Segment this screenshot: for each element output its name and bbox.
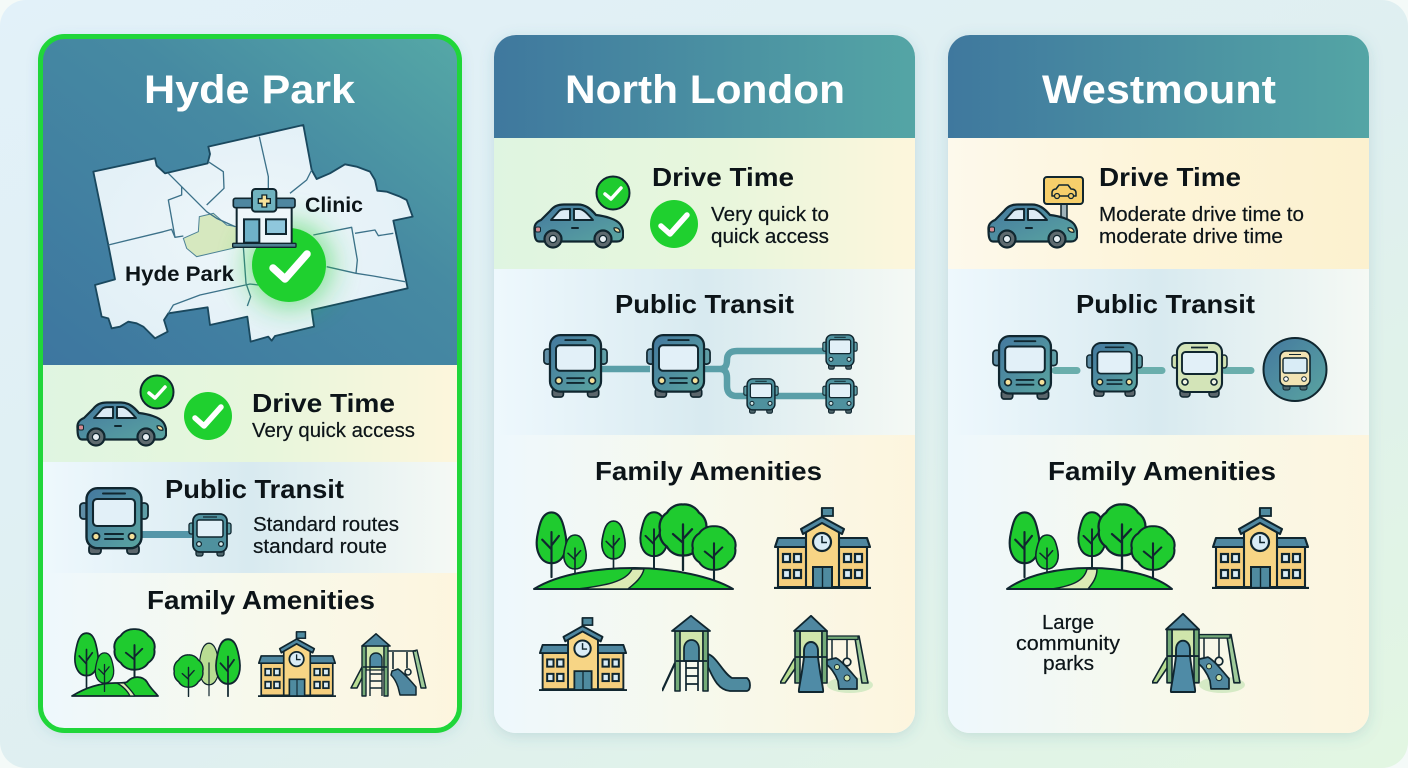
heading: Public Transit: Public Transit <box>165 474 344 504</box>
text: transit description: Standard routes <box>253 514 399 536</box>
icon: trees <box>174 639 240 696</box>
icon: bus 1 <box>993 336 1057 399</box>
Westmount title: Westmount <box>1042 68 1276 112</box>
section: drive time <box>948 138 1369 269</box>
icon: check badge <box>650 200 698 248</box>
icon: school 2 <box>539 618 627 690</box>
icon: school <box>774 508 871 588</box>
route lines <box>600 351 826 396</box>
icon: small bus middle <box>744 379 778 413</box>
icon: bus in circle <box>1264 338 1326 401</box>
icon: small bus bottom <box>823 379 857 413</box>
icon: park <box>534 504 736 589</box>
heading: Drive Time: Drive Time <box>652 162 794 192</box>
icon: road sign <box>1044 177 1083 225</box>
label: Clinic: Clinic <box>305 194 363 217</box>
heading: Family Amenities: Family Amenities <box>595 456 822 486</box>
text: drive description <box>711 204 829 248</box>
route segments <box>1055 367 1251 374</box>
heading: Public Transit: Public Transit <box>615 289 794 319</box>
icon: bus 1 <box>544 335 607 397</box>
section: drive time <box>494 138 915 269</box>
panel: North London <box>494 35 915 733</box>
Westmount header <box>948 35 1369 138</box>
section: family amenities <box>43 573 457 728</box>
icon: pale bus <box>1172 343 1227 397</box>
route line <box>140 531 192 538</box>
icon: park <box>1007 504 1175 589</box>
text: large community parks <box>1016 612 1120 675</box>
icon: car <box>77 402 166 446</box>
icon: car <box>988 204 1077 248</box>
icon: bus 2 <box>1087 343 1142 396</box>
Hyde Park header and map background <box>41 37 459 365</box>
text: large community parks: Large <box>1042 612 1094 634</box>
label: Hyde Park: Hyde Park <box>125 263 234 286</box>
section: family amenities <box>948 435 1369 733</box>
icon: check badge <box>184 392 232 440</box>
map of neighbourhoods <box>93 125 413 342</box>
text: drive description: Moderate drive time to <box>1099 204 1304 226</box>
section: public transit <box>43 462 457 573</box>
icon: playground <box>780 616 873 693</box>
text: large community parks: parks <box>1043 653 1094 675</box>
icon: park <box>72 629 158 696</box>
North London header <box>494 35 915 138</box>
icon: small bus top <box>823 335 857 369</box>
panel: Hyde Park <box>40 36 460 730</box>
text: drive description <box>1099 204 1304 248</box>
section: public transit <box>494 269 915 435</box>
text: drive description: Very quick access <box>252 420 415 442</box>
icon: clinic <box>233 189 296 247</box>
text: transit description <box>253 514 399 558</box>
text: drive description: Very quick to <box>711 204 829 226</box>
icon: small check badge <box>596 176 630 210</box>
text: large community parks: community <box>1016 633 1120 655</box>
icon: school <box>1212 508 1309 588</box>
icon: slide <box>662 616 750 691</box>
heading: Public Transit: Public Transit <box>1076 289 1255 319</box>
heading: Drive Time: Drive Time <box>1099 162 1241 192</box>
icon: bus 2 <box>647 335 710 397</box>
icon: small check badge <box>140 376 174 408</box>
text: drive description: quick access <box>711 226 829 248</box>
icon: playground <box>351 634 426 696</box>
text: transit description: standard route <box>253 536 387 558</box>
heading: Family Amenities: Family Amenities <box>147 585 375 615</box>
icon: small bus <box>189 514 231 556</box>
North London title: North London <box>565 68 845 112</box>
icon: car <box>534 204 623 248</box>
highlight border <box>40 36 460 730</box>
text: drive description: moderate drive time <box>1099 226 1283 248</box>
icon: school <box>258 632 336 696</box>
map check marker <box>249 225 329 305</box>
icon: playground <box>1152 614 1245 693</box>
section: drive time <box>43 365 457 462</box>
heading: Family Amenities: Family Amenities <box>1048 456 1276 486</box>
icon: bus <box>80 488 148 554</box>
heading: Drive Time: Drive Time <box>252 388 395 418</box>
section: public transit <box>948 269 1369 435</box>
section: family amenities <box>494 435 915 733</box>
panel: Westmount <box>948 35 1369 733</box>
Hyde Park title: Hyde Park <box>144 68 356 112</box>
